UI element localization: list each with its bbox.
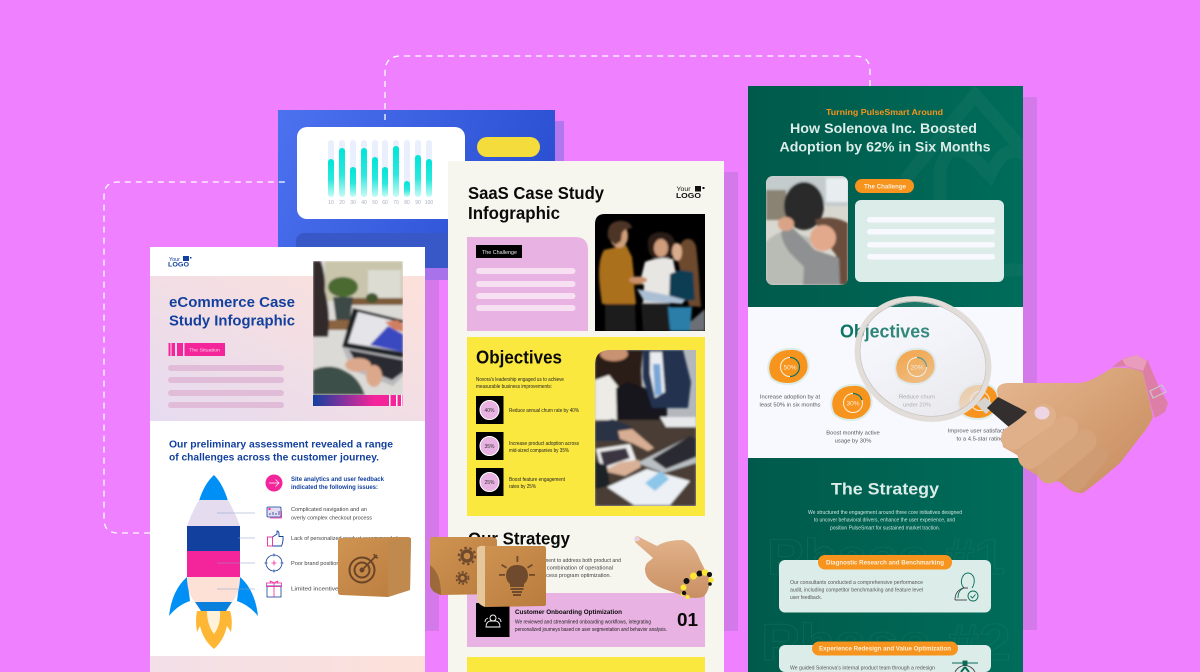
cube: light bulb bbox=[477, 546, 546, 607]
strategy text: to uncover behavioral drivers, enhance the user experience, and bbox=[814, 518, 955, 524]
objective: adoption 50% bbox=[760, 349, 821, 408]
icon: vector pen bbox=[952, 661, 978, 672]
outlined phase 2: Phase #2 bbox=[761, 614, 1011, 672]
objective 40%: Reduce annual churn rate by 40% bbox=[509, 408, 580, 414]
onboarding box: 01 bbox=[677, 609, 698, 630]
chart card bbox=[297, 127, 465, 219]
tag: the situation: The Situation bbox=[189, 348, 221, 352]
assessment heading: of challenges across the customer journey. bbox=[169, 452, 379, 464]
bar chart: 50 bbox=[372, 200, 378, 206]
panel shadows bbox=[289, 97, 1037, 631]
strategy text: improvements and customer success program optimization. bbox=[468, 573, 611, 579]
objective: adoption 50%: Increase adoption by at bbox=[760, 394, 821, 400]
strategy text: We structured the engagement around three core initiatives designed bbox=[808, 510, 962, 516]
cube: target bbox=[338, 537, 411, 597]
icon: browser bbox=[267, 507, 282, 518]
strategy section bbox=[748, 458, 1023, 672]
objective: usage 30%: 30% bbox=[846, 400, 860, 408]
bar chart: 100 bbox=[425, 200, 433, 206]
rocket bbox=[169, 475, 258, 649]
objectives heading: Objectives bbox=[476, 348, 562, 368]
phase 1 card bbox=[779, 555, 991, 612]
text: navigation issue: overly complex checkout process bbox=[291, 516, 372, 522]
dashed connector left bbox=[104, 182, 287, 533]
objectives heading: Objectives bbox=[840, 322, 930, 342]
objective 35%: mid-sized companies by 35% bbox=[509, 448, 570, 454]
panel: Solenova case study bbox=[748, 86, 1040, 672]
icon: target bbox=[264, 554, 284, 572]
objectives intro: Novora's leadership engaged us to achieve bbox=[476, 377, 564, 383]
logo: LOGO bbox=[676, 193, 702, 200]
title: How Solenova Inc. Boosted bbox=[790, 121, 977, 136]
eyebrow: Turning PulseSmart Around bbox=[826, 108, 943, 117]
phase 1 card: Diagnostic Research and Benchmarking bbox=[826, 560, 944, 566]
objective 35%: Increase product adoption across bbox=[509, 441, 579, 447]
objectives intro bbox=[476, 377, 564, 390]
pointing hand bbox=[634, 536, 714, 599]
list intro text bbox=[291, 477, 385, 491]
onboarding box: Customer Onboarding Optimization bbox=[515, 609, 622, 616]
objective 25%: 25% bbox=[484, 480, 495, 486]
bar chart: 90 bbox=[415, 200, 421, 206]
objective: churn 20%: under 20% bbox=[903, 402, 931, 408]
panel: SaaS case study bbox=[448, 161, 724, 672]
decorative background motif bbox=[905, 95, 1040, 270]
bar chart: 30 bbox=[350, 200, 356, 206]
phase 2 card bbox=[779, 642, 991, 672]
magnifying glass bbox=[836, 276, 1030, 442]
text: navigation issue: Complicated navigation and an bbox=[291, 507, 367, 513]
objective: adoption 50%: least 50% in six months bbox=[760, 402, 821, 408]
palm and thumb bbox=[997, 368, 1153, 493]
list intro text: indicated the following issues: bbox=[291, 485, 378, 491]
text: personalization issue: Lack of personalized product recommendations bbox=[291, 536, 407, 542]
title bbox=[468, 183, 604, 223]
next yellow box bbox=[467, 657, 705, 672]
hand holding magnifier bbox=[997, 355, 1168, 493]
strategy text: position PulseSmart for sustained market traction. bbox=[830, 526, 940, 532]
title: Infographic bbox=[468, 203, 560, 223]
bar chart: 40 bbox=[361, 200, 367, 206]
objective: churn 20%: 20% bbox=[910, 364, 924, 372]
objectives intro: measurable business improvements: bbox=[476, 384, 552, 390]
fingers bbox=[1013, 416, 1098, 481]
assessment heading: Our preliminary assessment revealed a range bbox=[169, 438, 393, 450]
photo: person on laptop bbox=[313, 261, 403, 406]
icon: person with check bbox=[955, 573, 978, 601]
logo: LOGO bbox=[168, 262, 189, 268]
objective 25%: rates by 25% bbox=[509, 484, 537, 490]
objective: usage 30% bbox=[826, 385, 880, 444]
phase 1 card: audit, including competitor benchmarking and feature level bbox=[790, 588, 923, 594]
objective: churn 20% bbox=[895, 349, 936, 408]
logo: Your bbox=[169, 257, 180, 263]
onboarding box bbox=[467, 593, 705, 647]
strap buckle bbox=[1150, 385, 1166, 398]
bar chart: 80 bbox=[404, 200, 410, 206]
objective: rating bbox=[948, 384, 1012, 442]
handle collar bbox=[976, 397, 995, 414]
tag: the challenge: The Challenge bbox=[864, 184, 907, 190]
objective: usage 30%: Boost monthly active bbox=[826, 430, 880, 436]
lens rim inner edge bbox=[840, 280, 1006, 438]
header band bbox=[150, 276, 425, 421]
logo: Your bbox=[676, 187, 690, 193]
title bbox=[780, 121, 990, 154]
strategy text bbox=[808, 510, 962, 532]
strategy text bbox=[468, 558, 621, 579]
lower darker block bbox=[296, 233, 555, 268]
tag: the challenge bbox=[855, 179, 914, 193]
wrist strap bbox=[1112, 355, 1168, 418]
lens bbox=[836, 276, 1010, 442]
text placeholder lines bbox=[168, 365, 284, 408]
text: positioning issue: Poor brand positioning bbox=[291, 561, 347, 567]
bottom gradient band bbox=[150, 656, 425, 672]
title: eCommerce Case bbox=[169, 295, 295, 311]
handle bbox=[987, 395, 1030, 428]
phase 1 card: Our consultants conducted a comprehensive performance bbox=[790, 580, 923, 586]
objective: churn 20%: Reduce churn bbox=[899, 394, 935, 400]
objective: adoption 50%: 50% bbox=[783, 364, 797, 372]
title: Adoption by 62% in Six Months bbox=[780, 140, 990, 154]
strategy heading: Our Strategy bbox=[468, 528, 570, 548]
bar chart: 60 bbox=[382, 200, 388, 206]
icon: arrow bbox=[266, 474, 282, 492]
challenge box: The Challenge bbox=[482, 250, 517, 256]
dashed connector top bbox=[385, 56, 870, 120]
photo: team around laptop bbox=[595, 347, 696, 506]
icon: thumbs up bbox=[268, 531, 283, 546]
bar chart: 70 bbox=[393, 200, 399, 206]
thumbnail bbox=[1034, 406, 1050, 420]
objectives box bbox=[467, 337, 705, 516]
bar chart bbox=[328, 140, 433, 206]
icon: gift bbox=[266, 581, 282, 597]
assessment heading bbox=[169, 438, 393, 464]
strategy text: We developed a targeted engagement to address both product and bbox=[468, 558, 621, 564]
objectives section bbox=[748, 307, 1023, 458]
title bbox=[169, 295, 295, 330]
strap top highlight bbox=[1122, 355, 1147, 371]
bar chart: 10 bbox=[328, 200, 334, 206]
icon: users bbox=[485, 615, 501, 627]
list intro text: Site analytics and user feedback bbox=[291, 477, 385, 483]
onboarding box: personalized journeys based on user segmentation and behavior analysis. bbox=[515, 627, 667, 633]
onboarding box: We reviewed and streamlined onboarding workflows, integrating bbox=[515, 620, 651, 626]
colour bar bbox=[313, 395, 389, 406]
panel: eCommerce case study bbox=[150, 247, 425, 672]
panel: blue dashboard card bbox=[278, 110, 555, 268]
objective: rating: Improve user satisfaction bbox=[948, 428, 1012, 434]
bar chart: 20 bbox=[339, 200, 345, 206]
logo bbox=[168, 256, 192, 268]
challenge card bbox=[855, 200, 1004, 282]
challenge box bbox=[467, 237, 588, 331]
objective 40% bbox=[476, 396, 580, 424]
cube: gears bbox=[430, 537, 497, 595]
objective 35%: 35% bbox=[484, 444, 495, 450]
title: SaaS Case Study bbox=[468, 183, 604, 203]
phase 2 card: Experience Redesign and Value Optimization bbox=[819, 646, 951, 652]
tag: the situation bbox=[168, 343, 225, 356]
yellow pill bbox=[477, 137, 540, 157]
strategy text: customer challenges through a combination of operational bbox=[468, 566, 613, 572]
objective 25% bbox=[476, 468, 566, 496]
objective: rating: to a 4.5-star rating bbox=[956, 436, 1004, 442]
strategy heading: The Strategy bbox=[831, 480, 940, 498]
title: Study Infographic bbox=[169, 314, 295, 330]
issue list bbox=[264, 474, 407, 597]
objective 25%: Boost feature engagement bbox=[509, 477, 566, 483]
objective 35% bbox=[476, 432, 579, 460]
photo: three colleagues bbox=[595, 214, 705, 331]
objective: usage 30%: usage by 30% bbox=[835, 438, 871, 444]
logo bbox=[676, 186, 704, 200]
outlined phase 1: Phase #1 bbox=[767, 529, 1005, 585]
photo: father hugging daughter bbox=[766, 176, 848, 285]
phase 1 card: user feedback. bbox=[790, 595, 822, 601]
lens rim bbox=[836, 276, 1010, 442]
text: navigation issue bbox=[291, 507, 372, 522]
phase 2 card: We guided Solenova's internal product team through a redesign bbox=[790, 666, 935, 672]
text: incentives issue: Limited incentives for bbox=[291, 586, 351, 592]
objective 40%: 40% bbox=[484, 408, 495, 414]
